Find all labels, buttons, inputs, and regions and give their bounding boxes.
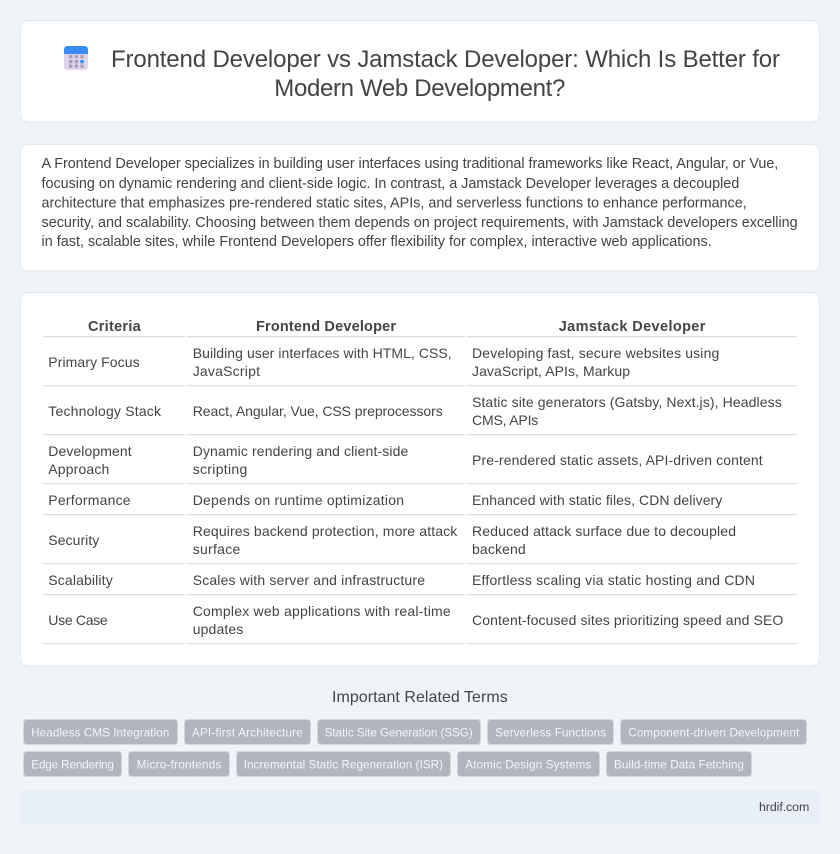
table header row bbox=[88, 319, 706, 335]
icon: calendar bbox=[64, 46, 88, 70]
table row: primary focus: JavaScript bbox=[193, 363, 260, 379]
table row: security: Requires backend protection, more attack bbox=[193, 523, 458, 539]
table row: use case: Complex web applications with real-time bbox=[193, 603, 451, 619]
table row: scalability: Scales with server and infrastructure bbox=[193, 572, 425, 588]
table row: performance: Depends on runtime optimization bbox=[193, 492, 404, 508]
table row: scalability: Effortless scaling via static hosting and CDN bbox=[472, 572, 755, 588]
table row: use case: Content-focused sites prioritizing speed and SEO bbox=[472, 612, 783, 628]
tag: headless cms integration: Headless CMS Integration bbox=[31, 726, 169, 740]
table row: use case: updates bbox=[193, 621, 243, 637]
table row: development approach: Approach bbox=[48, 461, 109, 477]
table row: primary focus bbox=[48, 345, 719, 379]
title: Modern Web Development? bbox=[274, 75, 565, 102]
title bbox=[111, 46, 780, 102]
table row: technology stack: CMS, APIs bbox=[472, 412, 538, 428]
tag: component-driven development bbox=[620, 720, 806, 744]
title: Frontend Developer vs Jamstack Developer: Which Is Better for bbox=[111, 46, 780, 73]
tag: static site generation: Static Site Generation (SSG) bbox=[325, 726, 473, 740]
tag: api-first architecture: API-first Architecture bbox=[192, 726, 303, 740]
table row: security: surface bbox=[193, 541, 241, 557]
table row: scalability bbox=[48, 572, 755, 588]
table row: technology stack: Static site generators (Gatsby, Next.js), Headless bbox=[472, 394, 782, 410]
footer: hrdif.com bbox=[759, 800, 809, 814]
table row: performance: Enhanced with static files, CDN delivery bbox=[472, 492, 722, 508]
table row: technology stack: Technology Stack bbox=[48, 403, 162, 419]
table row: technology stack bbox=[48, 394, 782, 428]
tag: serverless functions: Serverless Functions bbox=[495, 726, 606, 740]
table row: development approach: Dynamic rendering and client-side bbox=[193, 443, 409, 459]
table row: development approach: scripting bbox=[193, 461, 247, 477]
table row: primary focus: Primary Focus bbox=[48, 354, 140, 370]
tag: component-driven development: Component-driven Development bbox=[628, 726, 800, 740]
table row: primary focus: Building user interfaces with HTML, CSS, bbox=[193, 345, 452, 361]
text block: introduction paragraph bbox=[42, 156, 798, 250]
tag: headless cms integration bbox=[24, 720, 178, 744]
text block: introduction paragraph: security, and scalability. Choosing between them depends on project requirements, with Jamstack developers excelling bbox=[42, 215, 798, 231]
heading: important related terms: Important Related Terms bbox=[332, 689, 508, 706]
text block: introduction paragraph: architecture that emphasizes pre-rendered static sites, APIs, and serverless functions to enhance performance, bbox=[42, 196, 747, 212]
panel: comparison table bbox=[20, 292, 820, 666]
tag: micro-frontends bbox=[128, 752, 230, 776]
table row: use case: Use Case bbox=[48, 612, 108, 628]
table row: use case bbox=[48, 603, 783, 637]
tag: static site generation bbox=[318, 720, 480, 744]
tag: edge rendering bbox=[24, 752, 122, 776]
tag: edge rendering: Edge Rendering bbox=[31, 758, 114, 772]
table row: security: backend bbox=[472, 541, 526, 557]
table row: development approach: Pre-rendered static assets, API-driven content bbox=[472, 452, 763, 468]
table row: primary focus: Developing fast, secure websites using bbox=[472, 345, 719, 361]
text block: introduction paragraph: in fast, scalable sites, while Frontend Developers offer flexibility for complex, interactive web applications. bbox=[42, 234, 712, 250]
table row: development approach bbox=[48, 443, 763, 477]
text block: introduction paragraph: A Frontend Developer specializes in building user interfaces using traditional frameworks like React, Angular, or Vue, bbox=[42, 156, 778, 172]
tag: api-first architecture bbox=[184, 720, 310, 744]
tag: incremental static regeneration bbox=[236, 752, 450, 776]
tag list: related terms bbox=[24, 720, 806, 776]
tag: micro-frontends: Micro-frontends bbox=[137, 758, 222, 772]
tag: atomic design systems: Atomic Design Systems bbox=[465, 758, 592, 772]
panel: introduction bbox=[20, 144, 820, 271]
tag: serverless functions bbox=[488, 720, 614, 744]
table row: performance bbox=[48, 492, 722, 508]
table header row: Frontend Developer bbox=[256, 319, 396, 335]
table row: primary focus: JavaScript, APIs, Markup bbox=[472, 363, 630, 379]
table row: performance: Performance bbox=[48, 492, 131, 508]
table row: security bbox=[48, 523, 736, 557]
footer bbox=[20, 790, 820, 824]
table header row: Jamstack Developer bbox=[559, 319, 706, 335]
text block: introduction paragraph: focusing on dynamic rendering and client-side logic. In contrast, a Jamstack Developer leverages a decoupled bbox=[42, 176, 739, 192]
tag: build-time data fetching bbox=[606, 752, 752, 776]
table row: security: Security bbox=[48, 532, 99, 548]
panel: title card bbox=[20, 20, 820, 122]
table row: security: Reduced attack surface due to decoupled bbox=[472, 523, 736, 539]
table row: technology stack: React, Angular, Vue, CSS preprocessors bbox=[193, 403, 443, 419]
tag: build-time data fetching: Build-time Data Fetching bbox=[614, 758, 744, 772]
table header row: Criteria bbox=[88, 319, 142, 335]
tag: atomic design systems bbox=[458, 752, 600, 776]
table row: scalability: Scalability bbox=[48, 572, 113, 588]
tag: incremental static regeneration: Incremental Static Regeneration (ISR) bbox=[244, 758, 443, 772]
table row: development approach: Development bbox=[48, 443, 132, 459]
